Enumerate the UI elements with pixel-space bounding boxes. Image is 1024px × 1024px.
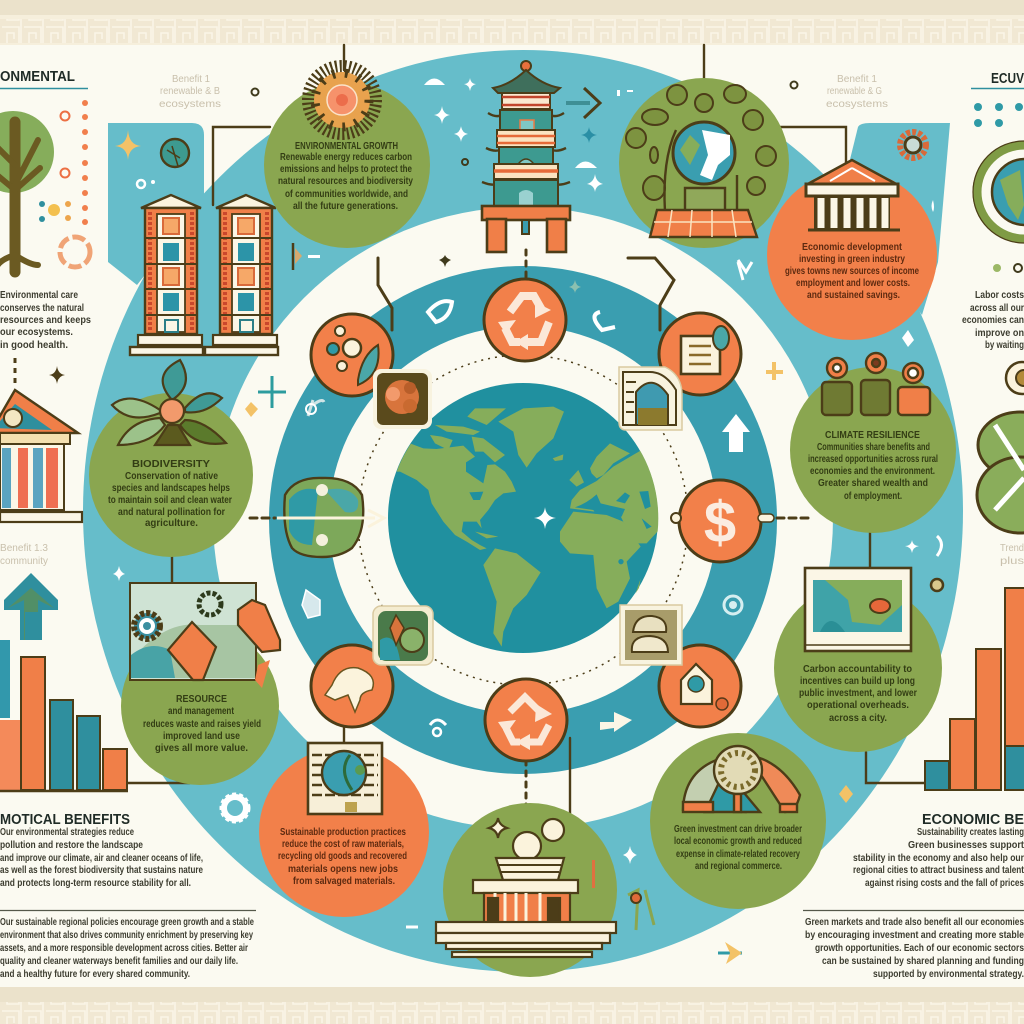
dotted orbit: [358, 355, 688, 685]
text lines: [785, 241, 919, 301]
icon: south-east tile: [620, 605, 682, 665]
text block: ecological benefits: pollution and restore the landscape: [0, 839, 143, 851]
icon: sunburst: [309, 67, 375, 133]
top decorative band: [0, 0, 1024, 45]
text block: economic benefits: [853, 826, 1024, 889]
icon: bottom recycle node: [485, 679, 567, 761]
text lines: BIODIVERSITY: [132, 458, 210, 470]
text lines: public investment, and lower: [799, 687, 917, 699]
text block: ecological benefits: and improve our climate, air and cleaner oceans of life,: [0, 852, 203, 864]
faint note: top right: ecosystems: [826, 99, 888, 110]
text lines: [108, 458, 232, 529]
panel: green sunburst circle: [264, 67, 430, 248]
icon: tree: [0, 111, 54, 272]
text lines: increased opportunities across rural: [808, 453, 938, 465]
icon: temple left: [0, 358, 82, 522]
text lines: agriculture.: [145, 517, 198, 529]
inner teal ring: [269, 266, 777, 774]
text block: environmental: resources and keeps: [0, 314, 91, 326]
text lines: Economic development: [802, 241, 902, 253]
icon: leaf flower: [112, 360, 226, 445]
text lines: ENVIRONMENTAL GROWTH: [295, 140, 398, 152]
text lines: CLIMATE RESILIENCE: [825, 429, 920, 441]
panel: twin towers with decorations: [115, 88, 320, 355]
icon: ringed globe: [973, 141, 1024, 272]
text block: left footer: environment that also drives community enrichment by preserving key: [0, 929, 253, 941]
text block: ecological benefits: Our environmental strategies reduce: [0, 826, 134, 838]
text lines: [808, 429, 938, 502]
icon: landscape picture: [130, 583, 280, 688]
faint note: top left: renewable & B: [160, 86, 220, 97]
text lines: Conservation of native: [125, 470, 218, 482]
icon: bank: [806, 160, 900, 230]
icon: leaf tile node: [277, 478, 384, 557]
faint note: lower left: Benefit 1.3: [0, 543, 48, 554]
text lines: from salvaged materials.: [293, 875, 395, 887]
icon: globe document: [308, 743, 382, 814]
text lines: reduces waste and raises yield: [143, 718, 261, 730]
text lines: gives all more value.: [155, 742, 248, 754]
text lines: and management: [168, 705, 234, 717]
text block: left footer: assets, and a more responsible development across cities. Better air: [0, 942, 248, 954]
bottom decorative band: [0, 987, 1024, 1024]
icon: north-west node: [311, 314, 393, 396]
left column: environmental heading: ONMENTAL: [0, 69, 75, 85]
faint note: top right: renewable & G: [827, 86, 882, 97]
panel: green lower-center circle: [650, 733, 826, 909]
panel: green lower-left circle: [121, 583, 280, 785]
icon: small leaves: [626, 85, 776, 200]
icon: pagoda tower: [482, 61, 570, 252]
text lines: and sustained savings.: [807, 289, 900, 301]
text block: environmental: Environmental care: [0, 289, 78, 301]
icon: south-west node: [311, 645, 393, 727]
text lines: Sustainable production practices: [280, 826, 406, 838]
connectors: [128, 45, 925, 817]
icon: north-west tile: [373, 369, 432, 429]
text lines: employment and lower costs.: [796, 277, 910, 289]
text block: environmental: conserves the natural: [0, 302, 84, 314]
text lines: investing in green industry: [799, 253, 905, 265]
text lines: Communities share benefits and: [817, 441, 930, 453]
text lines: economies and the environment.: [810, 465, 935, 477]
icon: temple: [436, 818, 616, 957]
text lines: operational overheads.: [807, 699, 909, 711]
bar chart: economic benefits: [925, 588, 1024, 790]
faint note: lower left: [0, 543, 48, 567]
text block: ecological benefits: [0, 826, 203, 889]
text block: environmental: in good health.: [0, 339, 68, 351]
icon: north-east node: [659, 313, 741, 395]
panel: green globe circle: [619, 78, 789, 248]
text lines: recycling old goods and recovered: [278, 850, 407, 862]
text lines: reduce the cost of raw materials,: [282, 838, 404, 850]
text lines: local economic growth and reduced: [674, 835, 802, 847]
text lines: species and landscapes helps: [112, 482, 230, 494]
text lines: to maintain soil and clean water: [108, 494, 232, 506]
icon: three people: [822, 353, 930, 415]
icon: top recycle node: [484, 279, 566, 361]
icon: south-west tile: [373, 606, 433, 665]
text lines: Greater shared wealth and: [818, 477, 928, 489]
faint note: top right: [826, 74, 888, 110]
panel: green lower-right circle: [774, 568, 942, 752]
decorative marks: inner ring and outer ring: [113, 301, 943, 964]
icon: south-east node: [659, 645, 741, 727]
text lines: RESOURCE: [176, 693, 227, 705]
faint note: lower right: plus: [1000, 556, 1024, 567]
text lines: across a city.: [829, 712, 887, 724]
text lines: of employment.: [844, 490, 902, 502]
text lines: Green investment can drive broader: [674, 823, 802, 835]
text block: environmental: [0, 289, 91, 351]
text block: left footer: Our sustainable regional policies encourage green growth and a stable: [0, 916, 254, 928]
right decorations: [569, 132, 934, 452]
faint note: lower left: community: [0, 556, 48, 567]
panel: green people circle: [790, 353, 956, 533]
icon: dollar node: $: [704, 490, 736, 555]
faint note: top left: Benefit 1: [172, 74, 210, 85]
text lines: all the future generations.: [293, 200, 398, 212]
text lines: expense in climate-related recovery: [676, 848, 800, 860]
text lines: incentives can build up long: [800, 675, 915, 687]
text block: left footer: and a healthy future for every shared community.: [0, 968, 190, 980]
text lines: gives towns new sources of income: [785, 265, 919, 277]
faint note: top left: [159, 74, 221, 110]
icon: north-east tile: [619, 367, 682, 430]
central globe: [388, 383, 667, 653]
faint note: lower right: [1000, 543, 1024, 567]
text lines: natural resources and biodiversity: [278, 175, 413, 187]
panel: orange lower-left circle: [259, 743, 429, 917]
text lines: [799, 663, 917, 724]
text block: environmental: our ecosystems.: [0, 326, 73, 338]
decorative dots and recycle ring: [39, 100, 90, 267]
bar chart: ecological benefits: [0, 573, 128, 791]
text lines: [278, 140, 413, 212]
text block: ecological benefits: and protects long-term resource stability for all.: [0, 877, 191, 889]
panel: orange bank circle: [767, 160, 937, 340]
icon: framed map: [805, 568, 911, 651]
text lines: Renewable energy reduces carbon: [280, 151, 412, 163]
text lines: [143, 693, 261, 754]
icon: knot: [977, 362, 1024, 533]
text lines: emissions and helps to protect the: [280, 163, 412, 175]
icon: dollar node: [671, 480, 774, 562]
text block: left footer: quality and cleaner waterways benefit families and our daily life.: [0, 955, 238, 967]
text lines: and natural pollination for: [118, 506, 225, 518]
text lines: and regional commerce.: [695, 860, 782, 872]
text lines: materials opens new jobs: [288, 863, 398, 875]
text lines: [278, 826, 407, 887]
text block: ecological benefits: as well as the forest biodiversity that sustains nature: [0, 864, 203, 876]
right heading: economic: [971, 71, 1024, 127]
panel: bottom temple circle: [436, 803, 617, 977]
heading: ecological benefits: MOTICAL BENEFITS: [0, 812, 130, 828]
text block: right environmental: [962, 289, 1024, 351]
text lines: [674, 823, 802, 872]
icon: globe on stand: [650, 122, 757, 237]
faint note: top right: Benefit 1: [837, 74, 877, 85]
decorative marks near pagoda: [424, 78, 798, 267]
text lines: improved land use: [163, 730, 240, 742]
text lines: of communities worldwide, and: [285, 188, 408, 200]
outer teal ring: [83, 50, 963, 972]
heading: economic benefits: ECONOMIC BE: [922, 812, 1024, 828]
faint note: top left: ecosystems: [159, 99, 221, 110]
text block: right footer: [803, 910, 1024, 980]
text lines: Carbon accountability to: [803, 663, 912, 675]
panel: green left leaf circle: [89, 360, 253, 557]
text block: left footer: [0, 910, 256, 980]
icon: magnifier and leaf hills: [683, 746, 800, 812]
